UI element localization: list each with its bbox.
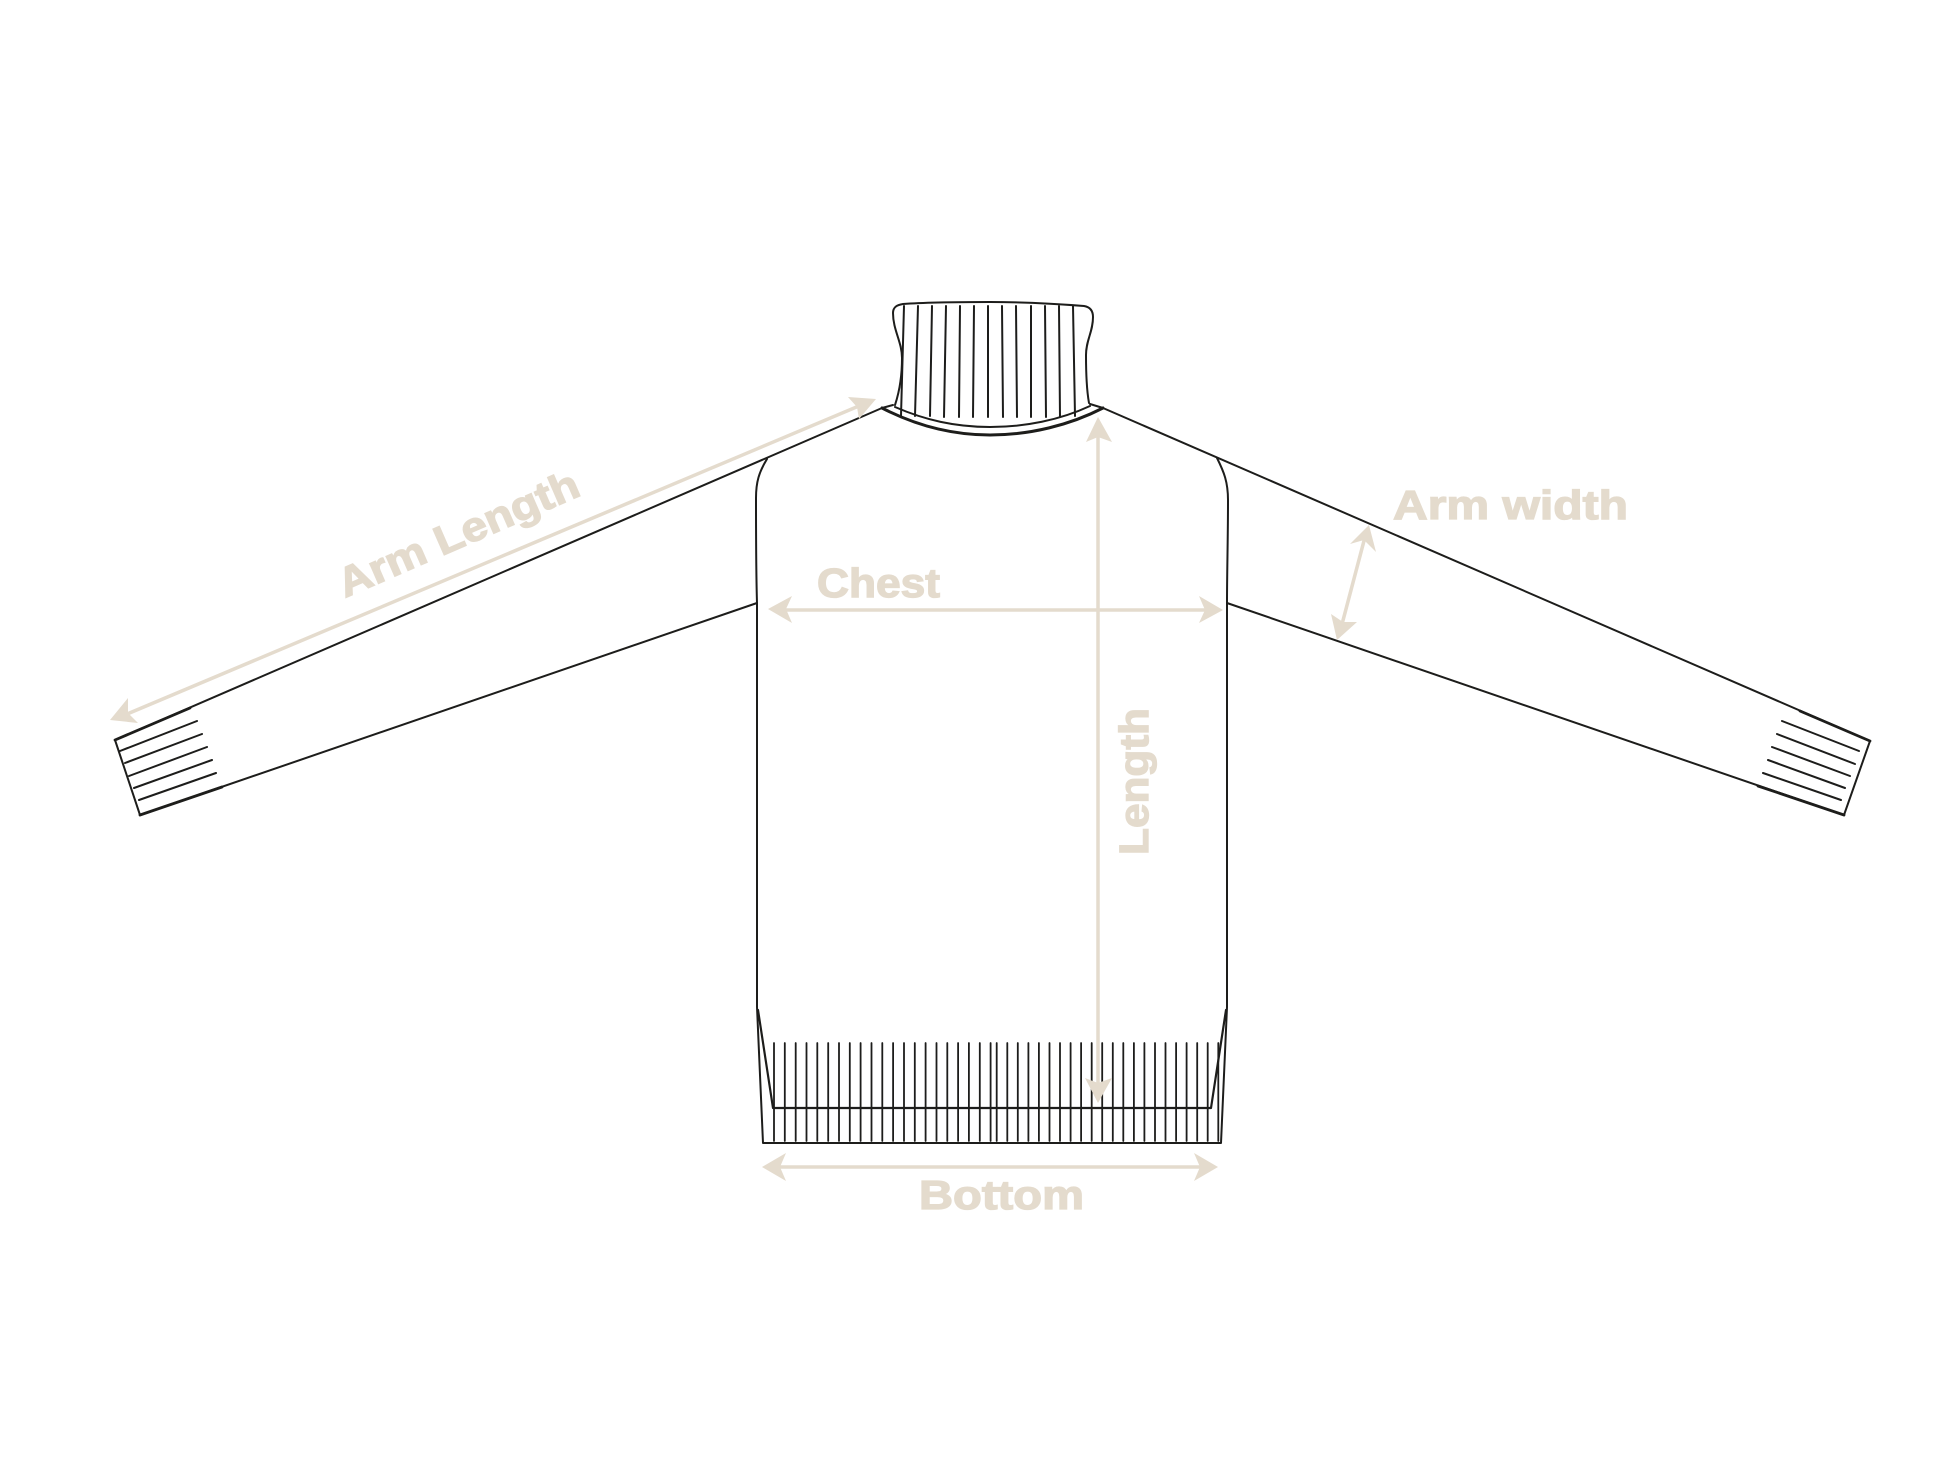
arrow: chest xyxy=(768,596,1223,623)
sweater body xyxy=(756,458,1228,1143)
left sleeve xyxy=(115,408,882,815)
label: Chest: Chest xyxy=(817,560,940,606)
arrow: length xyxy=(1085,417,1112,1103)
arrow: arm width xyxy=(1331,525,1376,640)
label: Arm Length: Arm Length xyxy=(330,461,586,606)
hem ribbing xyxy=(758,1010,1226,1141)
sweater line drawing xyxy=(115,302,1870,1143)
turtleneck collar xyxy=(882,302,1103,435)
right sleeve xyxy=(1103,408,1870,815)
arrow: arm length xyxy=(110,397,876,723)
arrow: bottom xyxy=(762,1153,1218,1181)
label: Length: Length xyxy=(1111,708,1157,855)
label: Arm width: Arm width xyxy=(1393,482,1628,528)
label: Bottom: Bottom xyxy=(919,1172,1084,1218)
